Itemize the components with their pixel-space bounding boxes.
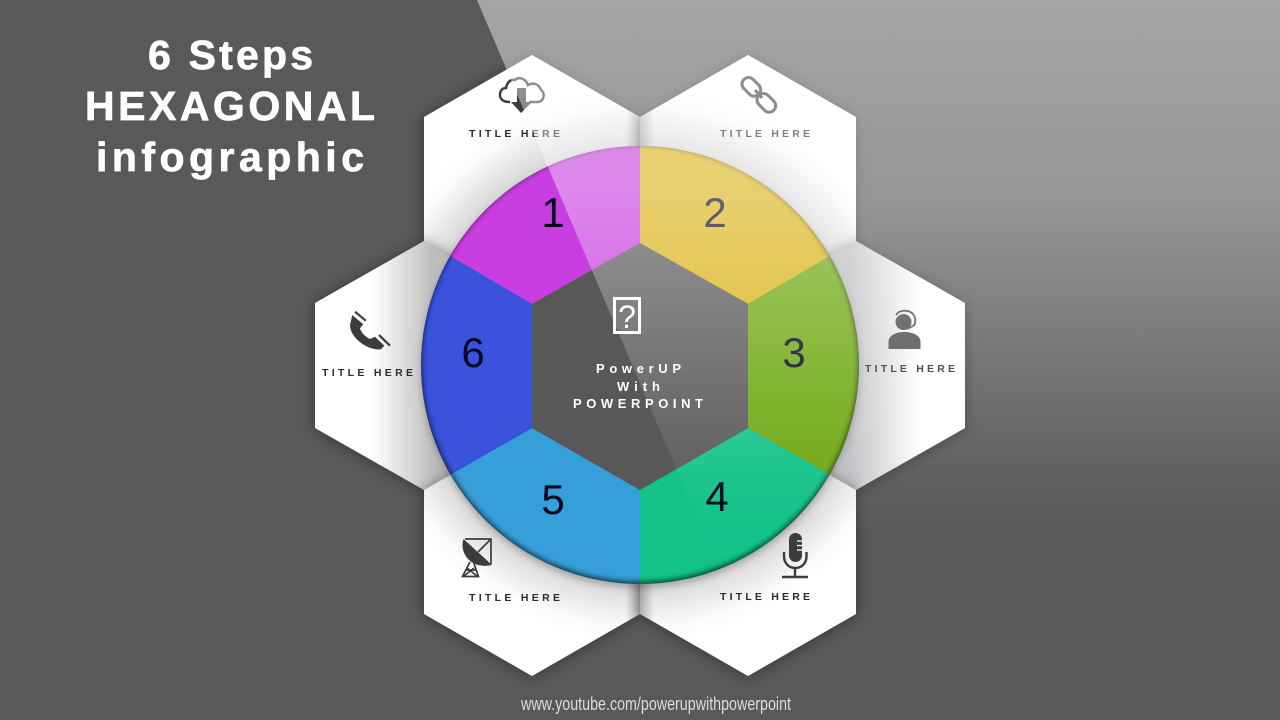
hexagon panel: step 6	[315, 241, 532, 490]
label: step 4 title: TITLE HERE	[720, 591, 810, 603]
light diagonal overlay	[477, 0, 1280, 720]
icon: support headset	[888, 311, 920, 349]
icon: telephone handset	[350, 312, 390, 349]
caption line 1: PowerUP	[596, 361, 681, 376]
title	[85, 32, 375, 180]
segment 5	[450, 428, 640, 584]
icon: cloud download	[500, 78, 544, 113]
label: step 2 title: TITLE HERE	[720, 128, 810, 140]
segment 3	[748, 256, 859, 474]
hexagon panel: step 2	[640, 55, 856, 303]
label: step 3 title: TITLE HERE	[865, 363, 955, 375]
junction shadow: bottom	[626, 580, 654, 622]
segment 6	[421, 256, 532, 474]
circular hexagon diagram	[418, 146, 862, 591]
icon: microphone	[782, 533, 808, 577]
number 5: 5	[541, 476, 565, 523]
number 6: 6	[461, 329, 485, 376]
number 2: 2	[703, 189, 727, 236]
segment 1	[450, 146, 640, 304]
circle shadow	[422, 146, 858, 584]
hexagon panel: step 4	[640, 428, 856, 676]
junction shadow: top	[626, 109, 654, 150]
title line 3: infographic	[96, 134, 364, 180]
center caption	[573, 361, 703, 411]
icon: question mark box: ?	[618, 299, 636, 335]
number 1: 1	[541, 189, 565, 236]
caption line 3: POWERPOINT	[573, 396, 703, 411]
icon: satellite dish	[462, 539, 492, 576]
label: step 5 title: TITLE HERE	[469, 592, 560, 604]
inner rim shadow	[418, 142, 862, 585]
segment 4	[640, 428, 830, 584]
hexagon panel: step 3	[748, 241, 965, 490]
footer url: www.youtube.com/powerupwithpowerpoint	[520, 694, 791, 714]
hexagon panel: step 1	[424, 55, 640, 303]
center hexagon	[532, 243, 748, 490]
label: step 6 title: TITLE HERE	[322, 367, 413, 379]
title line 1: 6 Steps	[148, 32, 313, 78]
caption line 2: With	[617, 379, 660, 394]
hexagon panel: step 5	[424, 428, 640, 676]
number 4: 4	[705, 473, 729, 520]
title line 2: HEXAGONAL	[85, 83, 375, 129]
label: step 1 title: TITLE HERE	[469, 128, 560, 140]
number 3: 3	[782, 329, 806, 376]
step numbers	[461, 189, 806, 523]
icon: chain link	[739, 75, 778, 115]
segment 2	[640, 146, 830, 304]
